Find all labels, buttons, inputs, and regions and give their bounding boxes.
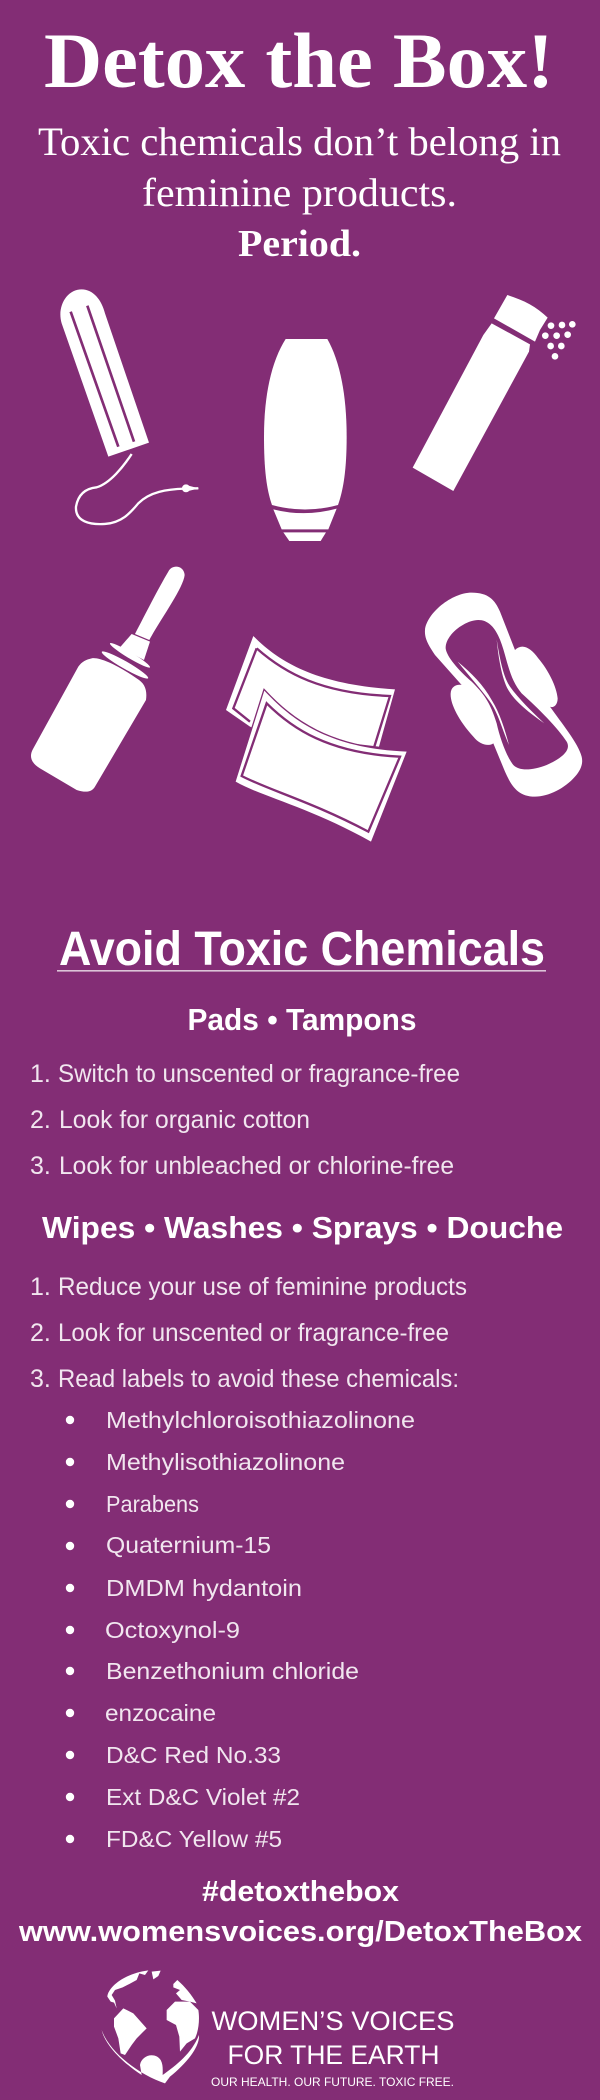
- list: wipes and washes tips: Read labels to avoid these chemicals:: [58, 1365, 459, 1393]
- list: chemicals to avoid: Benzethonium chloride: [106, 1658, 359, 1684]
- heading: avoid toxic chemicals: Avoid Toxic Chemicals: [59, 923, 545, 976]
- list: chemicals to avoid: Octoxynol-9: [105, 1617, 240, 1643]
- list: chemicals to avoid: Quaternium-15: [106, 1532, 271, 1558]
- website url: www.womensvoices.org/DetoxTheBox: [18, 1916, 582, 1948]
- list: wipes and washes tips: [30, 1273, 467, 1393]
- list: chemicals to avoid: Ext D&C Violet #2: [106, 1784, 300, 1810]
- list: wipes and washes tips: Look for unscented or fragrance-free: [58, 1319, 449, 1347]
- list: pads and tampons tips: 1.: [30, 1060, 51, 1088]
- icon: wash bottle: [264, 339, 347, 541]
- list: pads and tampons tips: 2.: [30, 1106, 51, 1134]
- list: pads and tampons tips: Look for organic cotton: [59, 1106, 310, 1134]
- icon: sanitary pad: [425, 593, 582, 797]
- logo: organization name: OUR HEALTH. OUR FUTURE. TOXIC FREE.: [211, 2075, 454, 2089]
- list: wipes and washes tips: 3.: [30, 1365, 51, 1393]
- list: chemicals to avoid: [66, 1407, 415, 1852]
- subtitle: [38, 119, 561, 265]
- list: pads and tampons tips: 3.: [30, 1152, 51, 1180]
- list: chemicals to avoid: Methylchloroisothiazolinone: [106, 1407, 415, 1433]
- title: Detox the Box!: [44, 17, 554, 104]
- subtitle: Toxic chemicals don’t belong in: [38, 119, 561, 164]
- subtitle: feminine products.: [142, 170, 457, 215]
- list: pads and tampons tips: Switch to unscented or fragrance-free: [58, 1060, 460, 1088]
- list: chemicals to avoid: FD&C Yellow #5: [106, 1826, 282, 1852]
- list: chemicals to avoid: DMDM hydantoin: [106, 1575, 302, 1601]
- list: pads and tampons tips: Look for unbleached or chlorine-free: [59, 1152, 454, 1180]
- logo: globe with figure: [102, 1970, 199, 2083]
- icon: tampon: [60, 289, 199, 524]
- subtitle: Period.: [238, 223, 361, 265]
- icon: wipes: [226, 636, 407, 842]
- hashtag: #detoxthebox: [202, 1876, 399, 1908]
- list: chemicals to avoid: Methylisothiazolinone: [106, 1449, 345, 1475]
- icon: douche bottle: [31, 567, 185, 792]
- list: wipes and washes tips: 1.: [30, 1273, 51, 1301]
- list: chemicals to avoid: D&C Red No.33: [106, 1742, 281, 1768]
- subheading: pads and tampons: Pads • Tampons: [188, 1002, 416, 1037]
- logo: organization name: WOMEN’S VOICES: [212, 2006, 454, 2036]
- logo: organization name: [211, 2006, 454, 2089]
- logo: organization name: FOR THE EARTH: [228, 2040, 440, 2070]
- list: chemicals to avoid: enzocaine: [105, 1700, 216, 1726]
- list: pads and tampons tips: [30, 1060, 460, 1180]
- list: chemicals to avoid: Parabens: [106, 1491, 199, 1517]
- list: wipes and washes tips: Reduce your use of feminine products: [58, 1273, 467, 1301]
- list: wipes and washes tips: 2.: [30, 1319, 51, 1347]
- icon: feminine spray: [413, 295, 576, 491]
- subheading: wipes, washes, sprays, douche: Wipes • Washes • Sprays • Douche: [42, 1210, 563, 1245]
